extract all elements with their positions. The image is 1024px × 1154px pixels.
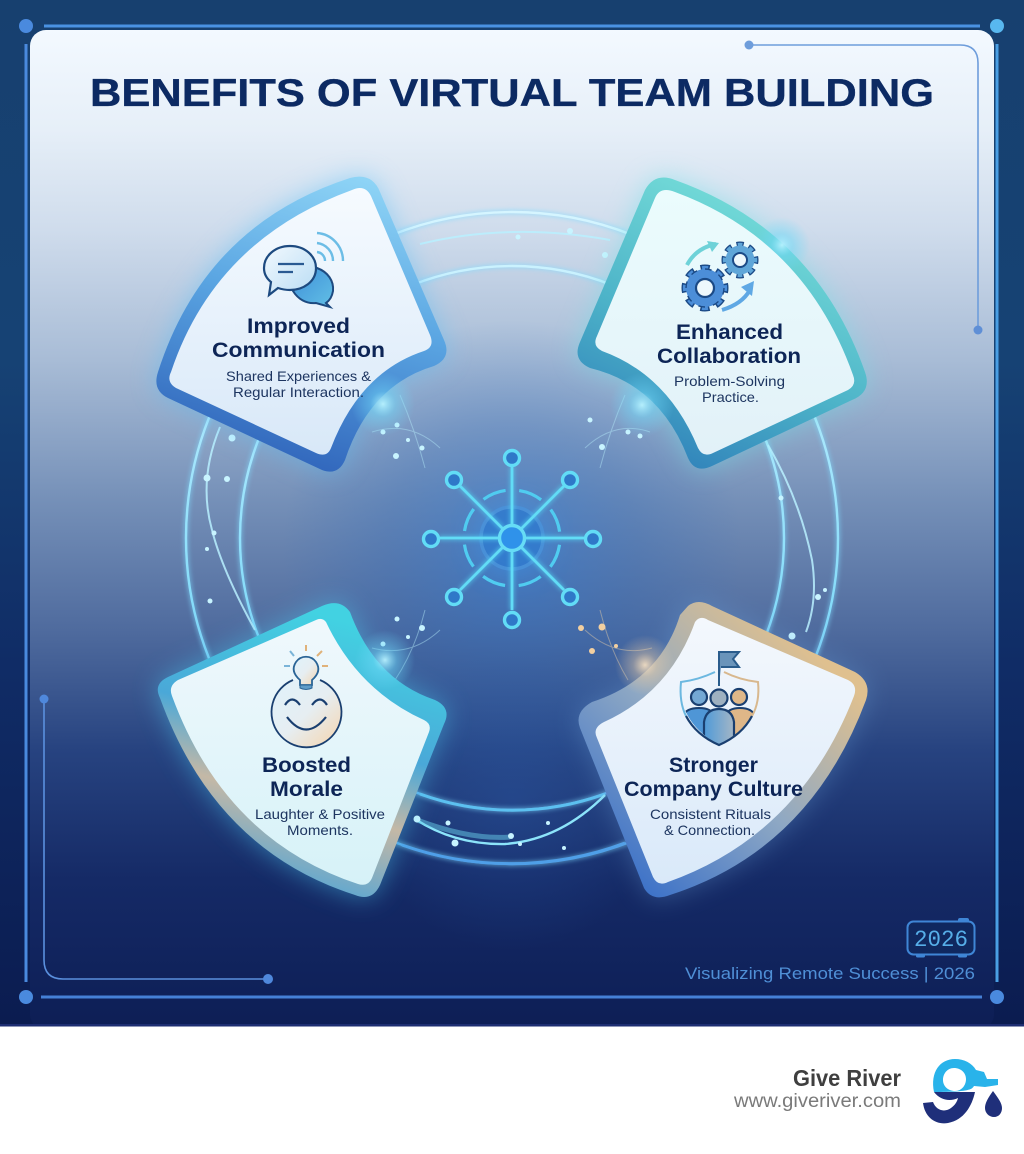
label: Enhanced Collaboration: Practice. <box>702 389 759 405</box>
label: Stronger Company Culture: Consistent Rituals <box>650 806 771 822</box>
card: Stronger Company Culture <box>578 602 868 897</box>
label: Boosted Morale <box>255 754 385 838</box>
icon: chat bubbles <box>264 233 343 307</box>
icon: Give River logo <box>923 1059 1002 1123</box>
label: Stronger Company Culture: Company Culture <box>624 778 803 801</box>
label: Improved Communication <box>212 315 385 400</box>
inner circuit line: bottom left <box>40 694 273 984</box>
label: Stronger Company Culture: & Connection. <box>664 822 755 838</box>
label: Enhanced Collaboration <box>657 321 801 405</box>
card: Improved Communication <box>156 177 446 472</box>
label: Improved Communication: Communication <box>212 339 385 362</box>
label: Boosted Morale: Morale <box>270 778 343 801</box>
label: Boosted Morale: Laughter & Positive <box>255 806 385 822</box>
label: Improved Communication: Shared Experiences & <box>226 368 372 384</box>
title: BENEFITS OF VIRTUAL TEAM BUILDING <box>90 72 934 115</box>
inner circuit line: top right <box>744 40 982 334</box>
label: Improved Communication: Improved <box>247 315 350 338</box>
icon: digital clock 2026 <box>908 918 974 958</box>
label: Improved Communication: Regular Interaction. <box>233 384 364 400</box>
label: Stronger Company Culture <box>624 754 803 838</box>
label: Boosted Morale: Moments. <box>287 822 353 838</box>
icon: gears and arrows <box>685 241 756 310</box>
central network hub <box>424 450 600 628</box>
light particles <box>204 228 827 850</box>
glowing orbit rings <box>186 212 838 864</box>
brand url: www.giveriver.com <box>733 1091 901 1112</box>
footer caption: Visualizing Remote Success | 2026 <box>685 964 975 983</box>
label: Stronger Company Culture: Stronger <box>669 754 758 777</box>
icon: smiley with light bulb <box>272 645 342 747</box>
label: Enhanced Collaboration: Enhanced <box>676 321 783 344</box>
icon: digital clock 2026: 2026 <box>914 927 968 953</box>
icon: shield with team and flag <box>681 652 758 746</box>
label: Enhanced Collaboration: Problem-Solving <box>674 373 785 389</box>
card: Boosted Morale <box>158 603 447 897</box>
label: Enhanced Collaboration: Collaboration <box>657 345 801 368</box>
card: Enhanced Collaboration <box>578 178 867 469</box>
label: Boosted Morale: Boosted <box>262 754 351 777</box>
brand name: Give River <box>793 1065 901 1091</box>
